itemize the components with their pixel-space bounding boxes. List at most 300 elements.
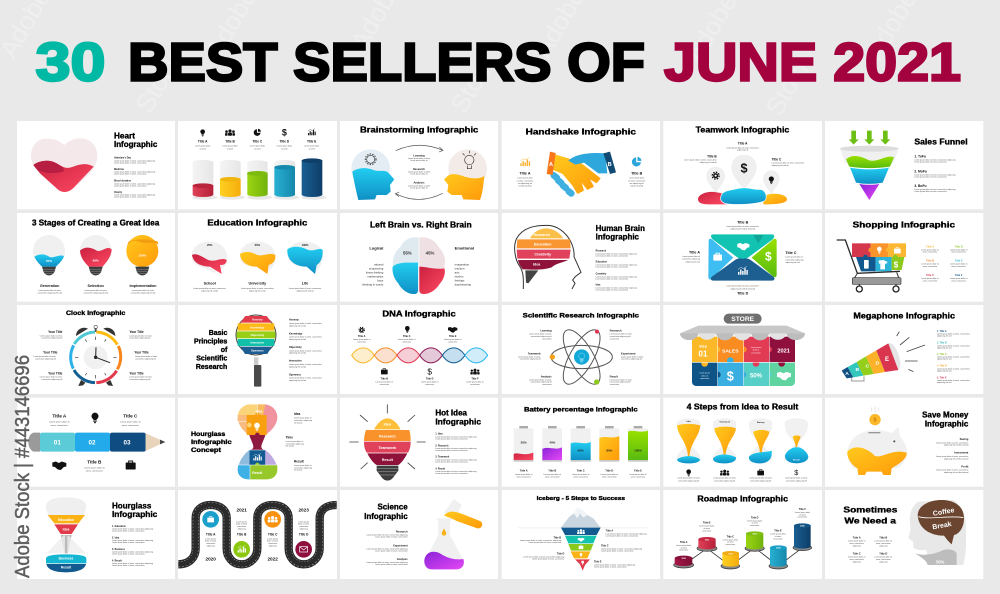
text block: Lorem ipsum dolor sit amet, consectetur adipiscing	[114, 171, 155, 174]
text block: Lorem ipsum dolor sit amet, consectetur adipiscing	[112, 562, 153, 565]
labels: consectetur	[679, 549, 689, 552]
brains	[192, 242, 323, 274]
labels: Lorem ipsum dolor	[747, 520, 763, 522]
labels: Lorem ipsum dolor	[277, 146, 292, 148]
bulb: Idea	[384, 422, 392, 426]
head and brain: Education	[534, 242, 552, 246]
labels: Lorem ipsum dolor sit amet, consectetur	[726, 285, 759, 288]
text block	[114, 157, 155, 199]
heading: We Need a	[844, 516, 897, 525]
panel: megaphone	[825, 305, 983, 394]
legend: adipiscing elit sed	[937, 369, 951, 372]
years and labels	[205, 508, 310, 561]
panel: cylinder bars	[178, 121, 337, 209]
years and labels: dolor sit amet	[236, 523, 248, 526]
heading: Scientific	[196, 355, 227, 362]
text block: Lorem ipsum dolor sit amet, consectetur adipiscing	[367, 534, 408, 537]
labels: Title C	[253, 140, 263, 144]
milestones	[202, 511, 312, 558]
labels: adipiscing	[879, 561, 887, 563]
text block	[914, 155, 955, 193]
legend: amet, consectetur	[951, 251, 966, 254]
labels: amet, consectetur	[86, 470, 103, 473]
panel: scientific research atom	[502, 305, 660, 394]
labels right: Your Title	[134, 351, 149, 355]
labels right: Your Title	[129, 371, 144, 375]
text block: Lorem ipsum dolor sit amet, consectetur	[936, 455, 969, 458]
text block: Lorem ipsum dolor sit amet, consectetur	[375, 563, 408, 566]
panel: save money	[825, 398, 983, 487]
labels: Lorem ipsum dolor sit amet, consectetur adipiscing	[520, 539, 561, 542]
heading: Hot Idea	[435, 409, 468, 418]
bulb	[364, 418, 411, 481]
labels: Lorem ipsum dolor	[517, 178, 533, 180]
puzzle: 50%	[750, 374, 763, 380]
piggy bank	[847, 427, 907, 475]
text block: Lorem ipsum dolor sit amet, consectetur adipiscing	[596, 264, 637, 267]
heading: Battery percentage infographic	[524, 407, 638, 414]
text block: Lorem ipsum dolor sit amet, consectetur	[435, 449, 468, 452]
labels: adipiscing elit sed	[686, 260, 700, 263]
labels: Title C	[403, 335, 411, 338]
envelope: $	[765, 250, 772, 264]
labels left: consectetur adipiscing elit	[41, 337, 63, 340]
labels	[37, 284, 157, 294]
labels: Lorem ipsum dolor sit amet, consectetur adipiscing	[601, 547, 642, 550]
labels: adipiscing elit sed do eiusmod	[730, 227, 755, 230]
heading: Infographic	[114, 140, 158, 149]
watermark pattern	[0, 0, 923, 121]
heading: Hourglass	[112, 501, 152, 510]
panel: handshake	[502, 121, 660, 209]
labels	[682, 220, 803, 296]
shopping cart	[837, 240, 906, 292]
labels: consectetur	[750, 524, 760, 527]
labels left: consectetur adipiscing elit	[35, 357, 56, 360]
bulbs: 55%	[46, 259, 52, 263]
heading	[112, 501, 158, 519]
labels: Lorem ipsum dolor sit amet,	[677, 477, 700, 480]
panel: left vs right brain	[340, 213, 498, 302]
labels: Lorem ipsum dolor sit amet, consectetur	[726, 225, 759, 228]
labels: Lorem ipsum dolor sit	[875, 540, 893, 543]
labels left: Lorem ipsum dolor sit amet,	[529, 378, 552, 381]
legend: Title B	[926, 259, 934, 263]
labels: Lorem ipsum dolor	[222, 146, 238, 148]
years and labels: Lorem ipsum	[205, 538, 216, 540]
head and brain: Research	[533, 233, 550, 237]
head and brain: Idea	[533, 262, 541, 266]
text block: Research	[396, 530, 408, 534]
road	[178, 505, 337, 564]
text block	[286, 412, 312, 472]
labels left: Lorem ipsum dolor sit amet,	[33, 355, 56, 358]
heading: Concept	[191, 447, 222, 454]
labels right: Lorem ipsum dolor sit amet,	[610, 333, 633, 336]
labels: Lorem ipsum dolor sit amet, consectetur adipiscing	[594, 563, 635, 566]
pins	[706, 155, 780, 195]
icons: $	[740, 161, 748, 175]
coffee bubble: Break	[932, 521, 952, 531]
text block: 1. ToFu	[914, 155, 926, 159]
cylinders: 2022	[728, 553, 734, 555]
labels: Title B	[381, 378, 388, 381]
legend: 4. Title D	[937, 365, 947, 368]
years and labels: consectetur	[206, 542, 216, 545]
panel: pencil	[17, 398, 175, 487]
legend: amet, consectetur	[923, 279, 938, 282]
text block: 2. MoFu	[914, 169, 927, 173]
labels	[676, 508, 810, 552]
years and labels: consectetur	[237, 525, 247, 528]
labels: Title A	[358, 335, 366, 338]
labels: Idea	[687, 421, 692, 423]
labels: Lorem ipsum dolor sit	[84, 466, 105, 469]
panel: clock	[17, 305, 175, 394]
labels: Title B	[553, 537, 561, 540]
labels: consectetur	[402, 340, 412, 343]
legend: Lorem ipsum dolor sit amet, consectetur	[937, 356, 970, 359]
labels: Title D	[751, 516, 759, 519]
text block: Lorem ipsum dolor sit amet, consectetur	[112, 541, 145, 544]
right list	[455, 246, 474, 287]
head	[908, 500, 966, 565]
labels: Title C	[785, 251, 797, 255]
text block: Lorem ipsum dolor sit amet, consectetur	[289, 349, 322, 352]
values and labels: 25%	[207, 243, 213, 247]
labels: sed do eiusmod	[519, 186, 531, 188]
coffee bubble	[918, 500, 964, 544]
panel: sales funnel	[825, 121, 983, 209]
megaphone	[842, 342, 903, 381]
text block: 4. Result	[112, 559, 122, 562]
labels: sit amet	[727, 541, 734, 544]
heading	[194, 330, 228, 371]
years and labels: 2021	[236, 508, 247, 513]
text block: Charity	[114, 191, 123, 194]
heading: Save Money	[922, 410, 969, 419]
labels: Lorem ipsum dolor sit	[120, 421, 141, 424]
labels: consectetur	[448, 340, 458, 343]
text block: consectetur adipiscing	[294, 419, 312, 422]
text block: Lorem ipsum dolor sit amet, consectetur adipiscing	[114, 194, 155, 197]
text block: Valentine's Day	[114, 157, 132, 160]
legend: Title D	[955, 244, 963, 248]
heading: Education Infographic	[207, 219, 308, 228]
labels: Title C	[853, 551, 861, 555]
values and labels: Lorem ipsum dolor sit amet, consectetur	[241, 287, 274, 290]
labels left: Your Title	[48, 371, 63, 375]
labels: Lorem ipsum dolor sit amet, consectetur adipiscing	[606, 533, 647, 536]
panel: store puzzle	[663, 305, 822, 394]
labels: consectetur adipiscing elit sed	[131, 291, 155, 294]
labels: Title A	[853, 535, 861, 539]
legend: 1. Title A	[937, 330, 947, 333]
batteries: 100%	[634, 448, 642, 452]
labels: Title B	[879, 535, 887, 539]
legend: 3. Title C	[937, 353, 947, 356]
labels: Lorem ipsum dolor sit amet, consectetur adipiscing	[523, 555, 564, 558]
text block: Lorem ipsum dolor sit amet, consectetur adipiscing	[435, 447, 476, 450]
labels right: consectetur	[610, 383, 620, 386]
puzzle: dolor sit	[701, 374, 708, 377]
years and labels: Lorem ipsum	[236, 521, 247, 523]
labels: Title A	[520, 469, 528, 473]
labels: Title C	[123, 413, 138, 418]
labels: Lorem ipsum dolor sit amet,	[38, 289, 61, 292]
labels left: consectetur	[542, 337, 552, 340]
heading	[364, 503, 408, 521]
heading	[596, 224, 645, 242]
text block: Idea	[596, 285, 601, 287]
text block: Lorem ipsum dolor sit amet, consectetur	[289, 363, 322, 366]
labels: amet, consectetur	[876, 542, 891, 545]
legend: amet, consectetur	[951, 265, 966, 268]
labels: adipiscing elit sed	[785, 261, 800, 264]
legend: Lorem ipsum dolor sit	[921, 277, 939, 280]
years and labels: 2022	[267, 556, 278, 561]
labels left: Learning	[540, 329, 552, 333]
heading: DNA Infographic	[382, 310, 456, 319]
legend: adipiscing elit sed	[937, 381, 951, 384]
labels: consectetur	[470, 383, 480, 386]
batteries: 80%	[606, 448, 613, 452]
labels left: Lorem ipsum dolor sit amet,	[518, 355, 541, 358]
text block: adipiscing elit sed do	[289, 379, 306, 382]
labels	[517, 172, 645, 188]
labels left: Your Title	[43, 351, 58, 355]
panel: DNA	[340, 305, 498, 394]
labels: Title B	[225, 140, 236, 144]
labels left: consectetur	[542, 383, 552, 386]
title: JUNE 2021	[664, 32, 961, 92]
labels: consectetur adipiscing	[785, 258, 803, 261]
labels: Title D	[280, 140, 290, 144]
labels right: Lorem ipsum dolor sit amet,	[610, 378, 633, 381]
labels right: Your Title	[129, 330, 144, 334]
cylinders: 2023	[752, 534, 758, 536]
text block: adipiscing elit sed do	[289, 338, 306, 341]
hourglass	[46, 497, 86, 572]
labels: Lorem ipsum dolor sit amet, consectetur	[726, 146, 759, 149]
panel: human brain	[502, 213, 660, 302]
bulbs: 66%	[93, 258, 99, 262]
text block: Lorem ipsum dolor sit amet, consectetur adipiscing	[367, 561, 408, 564]
labels: consectetur	[773, 537, 783, 540]
values and labels: adipiscing elit sed do	[201, 289, 218, 292]
text block: 4. Result	[435, 467, 445, 470]
hourglass: Idea	[63, 527, 69, 531]
labels: Lorem ipsum dolor sit	[629, 473, 647, 476]
legend: amet, consectetur	[923, 251, 938, 254]
text block: Creativity	[596, 272, 607, 275]
heading: Principles	[194, 339, 227, 346]
legend: Lorem ipsum dolor sit	[950, 248, 968, 251]
labels: Selection	[88, 284, 104, 288]
labels: adipiscing	[853, 545, 861, 547]
years and labels: consectetur	[299, 525, 309, 528]
years and labels: Lorem ipsum	[298, 521, 309, 523]
text block: Lorem ipsum dolor sit amet, consectetur adipiscing	[435, 458, 476, 461]
labels: adipiscing elit	[737, 149, 749, 152]
values and labels: adipiscing elit sed do	[297, 289, 313, 292]
heading: Shopping Infographic	[853, 220, 956, 229]
panel: iceberg	[502, 490, 660, 579]
labels: consectetur	[357, 340, 367, 343]
brain: 55%	[403, 251, 412, 256]
labels: amet, consectetur	[122, 424, 139, 427]
legend: Title E	[955, 259, 963, 263]
labels: Title A	[52, 413, 67, 418]
megaphone: B	[856, 367, 860, 373]
labels: Lorem ipsum dolor sit amet, consectetur	[684, 159, 717, 162]
magnifier: Openness	[251, 348, 264, 352]
bar chart: cylinders	[192, 158, 327, 200]
text block	[367, 530, 408, 566]
panel: hourglass	[17, 490, 175, 579]
text block: Lorem ipsum dolor sit amet, consectetur	[596, 266, 629, 269]
blobs	[698, 188, 787, 205]
labels: sit amet	[281, 147, 288, 150]
text block: Lorem ipsum dolor sit amet, consectetur	[112, 553, 145, 556]
labels: Lorem ipsum dolor sit	[848, 540, 866, 543]
labels right: consectetur adipiscing elit	[129, 337, 151, 340]
text block: adipiscing elit sed do eiusmod	[944, 471, 968, 474]
right list: imagination	[455, 262, 470, 266]
panel: hourglass puzzle	[178, 398, 337, 487]
heading: 3 Stages of Creating a Great Idea	[32, 219, 160, 228]
puzzle: dolor sit	[753, 349, 760, 352]
left list: mathematics	[367, 275, 384, 279]
labels	[353, 335, 484, 386]
text block: Lorem ipsum dolor sit amet, consectetur adipiscing	[114, 159, 155, 162]
puzzle: SALES	[722, 348, 739, 354]
text block: adipiscing elit sed do	[289, 352, 306, 355]
labels left: Lorem ipsum dolor sit amet,	[40, 334, 63, 337]
labels	[684, 142, 805, 167]
text block: Blood donation	[114, 180, 132, 183]
heading: Infographic	[112, 510, 158, 519]
labels right: Lorem ipsum dolor sit amet,	[621, 355, 644, 358]
heading: Infographic	[364, 512, 408, 521]
icons: $	[794, 468, 798, 477]
text block: Lorem ipsum dolor sit amet, consectetur	[114, 173, 147, 176]
coffee bubble: Coffee	[932, 507, 955, 518]
heading: of	[221, 347, 228, 354]
labels	[677, 421, 808, 482]
text block: Lorem ipsum dolor sit amet, consectetur adipiscing	[596, 275, 637, 278]
shopping cart: $	[894, 260, 899, 269]
legend: adipiscing elit sed	[937, 335, 951, 338]
labels right: Result	[610, 374, 618, 378]
text block: consectetur adipiscing	[286, 442, 304, 445]
labels: Lorem ipsum dolor	[304, 146, 320, 148]
labels: Lorem ipsum dolor sit	[410, 159, 428, 162]
heading: Iceberg - 5 Steps to Success	[537, 496, 625, 502]
title: 30	[36, 32, 106, 92]
legend: adipiscing elit sed	[937, 358, 951, 361]
icons	[686, 468, 798, 477]
arrows	[849, 131, 890, 145]
text block: Saving	[960, 437, 969, 441]
right head	[444, 149, 487, 200]
text block: Lorem ipsum dolor sit amet, consectetur	[375, 536, 408, 539]
puzzle	[692, 337, 795, 386]
megaphone: C	[866, 364, 870, 370]
heading: 4 Steps from Idea to Result	[687, 403, 799, 412]
labels: sit amet	[254, 147, 261, 150]
right list: daydreaming	[455, 283, 471, 287]
cylinders	[674, 523, 812, 569]
legend: Lorem ipsum dolor sit	[950, 277, 968, 280]
text block: Lorem ipsum dolor sit amet, consectetur adipiscing	[435, 470, 476, 473]
years and labels: adipiscing	[238, 528, 246, 530]
labels: consectetur	[726, 543, 735, 546]
heading: Infographic	[596, 233, 640, 242]
labels right: consectetur adipiscing elit	[129, 378, 151, 381]
text block	[289, 319, 322, 382]
heading: Megaphone Infographic	[853, 311, 956, 320]
text block: Idea	[294, 412, 301, 416]
cylinders: 2024	[776, 547, 781, 550]
text block: Lorem ipsum dolor sit amet, consectetur adipiscing	[112, 528, 153, 531]
legend: Title C	[926, 273, 934, 277]
values and labels: School	[204, 282, 216, 286]
magnifier: Knowledge	[250, 325, 265, 329]
labels left: consectetur adipiscing elit	[531, 381, 552, 384]
labels right	[610, 329, 644, 386]
left list: thinking in words	[362, 283, 384, 287]
labels: Learning	[413, 153, 425, 157]
sand top	[677, 424, 801, 457]
legend: Lorem ipsum dolor sit amet, consectetur	[937, 333, 970, 336]
hourglass: Result	[61, 566, 72, 570]
puzzle: Step	[699, 345, 708, 349]
labels	[520, 530, 647, 568]
heading: Scientific Research Infographic	[523, 312, 639, 319]
labels: sit amet, consectetur	[517, 179, 534, 182]
watermark pattern: Stock	[129, 46, 188, 118]
text block	[435, 434, 476, 475]
labels: Title C	[772, 157, 782, 161]
text block: consectetur adipiscing	[294, 466, 312, 469]
heading: Research	[196, 364, 227, 371]
text block: Lorem ipsum dolor sit amet, consectetur	[596, 289, 629, 292]
years and labels: dolor sit amet	[267, 540, 279, 543]
legend: Lorem ipsum dolor sit amet, consectetur	[937, 367, 970, 370]
bulb: Teamwork	[378, 446, 397, 450]
panel: brainstorming	[340, 121, 498, 209]
labels: adipiscing	[879, 545, 887, 547]
labels: Lorem ipsum dolor sit	[421, 381, 439, 384]
labels: Lorem ipsum dolor sit amet, consectetur	[532, 557, 565, 560]
labels: Lorem ipsum dolor sit amet, consectetur	[594, 565, 627, 568]
labels right: Experiment	[621, 351, 636, 355]
heading: Basic	[209, 330, 227, 337]
years and labels: dolor sit amet	[205, 540, 217, 543]
text block: Lorem ipsum dolor sit amet, consectetur adipiscing	[114, 182, 155, 185]
legend: amet, consectetur	[923, 265, 938, 268]
labels left: consectetur adipiscing elit	[41, 378, 63, 381]
puzzle: Lorem ipsum	[751, 347, 762, 349]
atom	[550, 325, 612, 389]
iceberg	[561, 508, 601, 571]
labels: sit amet, consectetur	[628, 179, 645, 182]
labels: Generation	[40, 284, 59, 288]
labels: Title C	[601, 545, 609, 548]
labels: Title D	[737, 292, 749, 296]
labels: Lorem ipsum dolor sit amet,	[785, 477, 808, 480]
